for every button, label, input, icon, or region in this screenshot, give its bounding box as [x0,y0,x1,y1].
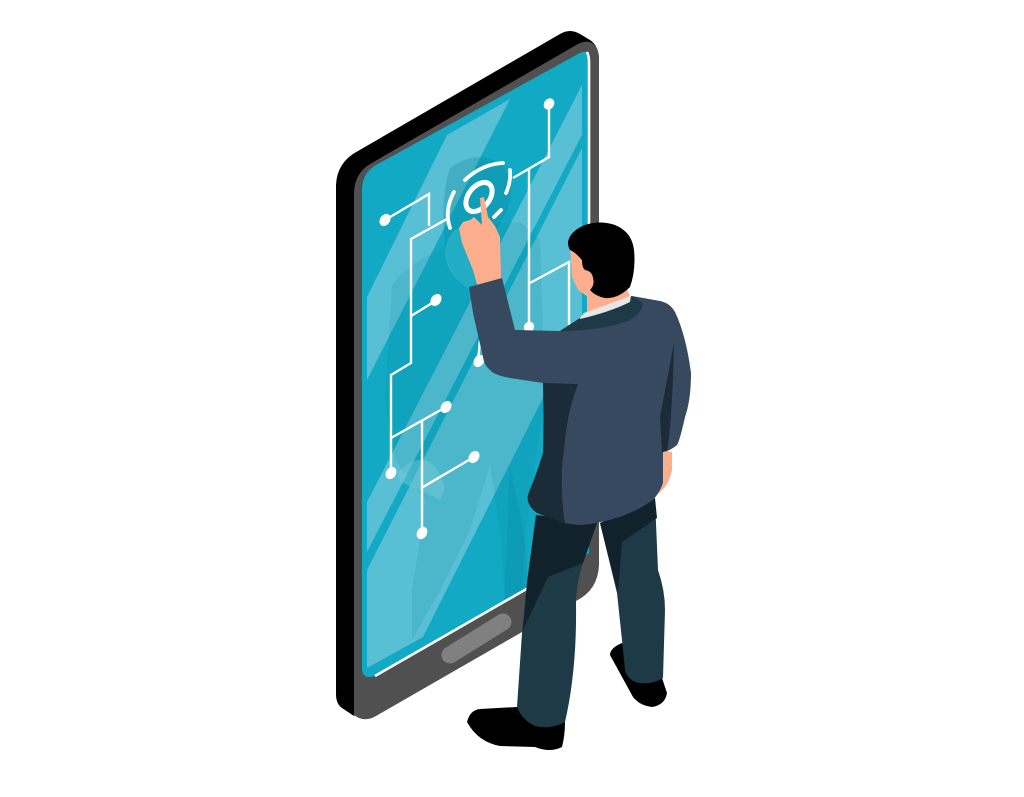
touch target rings [448,163,510,228]
illustration: man using giant smartphone [336,31,691,750]
jacket collar [560,296,643,331]
left leg shadow [523,515,597,630]
neck [587,285,630,314]
phone [336,31,599,719]
phone black side [336,31,599,716]
screen white edge [375,52,589,676]
sleeve shadow [660,343,674,452]
circuit lines [385,104,569,533]
left shoe [467,707,565,750]
raised hand [459,197,502,288]
circuit end dots [377,96,557,541]
left leg [517,515,597,727]
right leg [600,500,665,683]
jacket [469,278,691,525]
phone grey front [354,42,599,719]
shirt collar [580,296,631,319]
home button [450,622,503,655]
hair [568,222,634,298]
head [570,240,605,297]
left hand on hip [658,450,672,494]
phone screen [355,40,595,685]
reflection of the man on screen [385,157,545,640]
man [459,197,691,750]
right leg shadow [600,498,657,593]
jacket shadow side [528,383,578,524]
screen light stripes [367,85,582,668]
right shoe [610,643,667,707]
